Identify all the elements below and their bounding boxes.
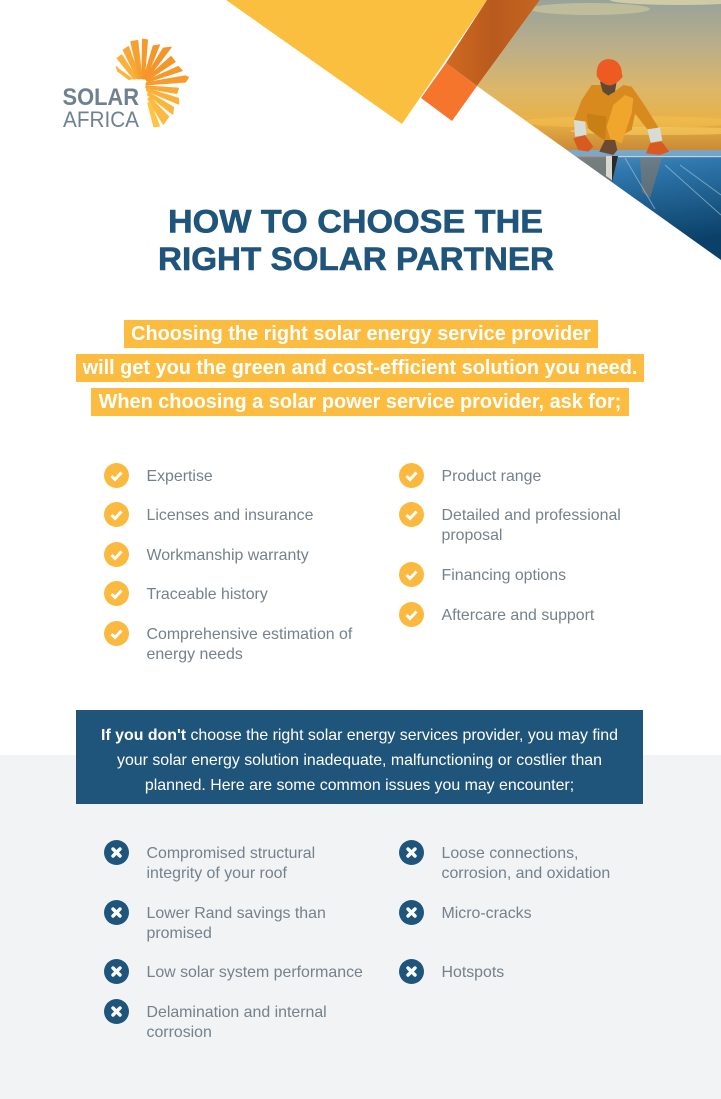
issues list: left column: integrity of your roof	[146, 865, 287, 882]
item: delamination: Delamination and internal	[146, 1004, 327, 1021]
issues list: right column: corrosion, and oxidation	[442, 865, 610, 882]
item: aftercare	[399, 602, 594, 627]
item: financing: Financing options	[442, 567, 566, 584]
item: expertise: Expertise	[146, 468, 213, 485]
item: low performance	[104, 959, 363, 984]
worker figure	[573, 59, 669, 155]
dark orange band	[446, 0, 540, 86]
highlight line 1: Choosing the right solar energy service provider	[131, 323, 591, 345]
background: lower grey section	[0, 755, 721, 1099]
item: estimation	[104, 621, 352, 663]
item: loose connections: Loose connections,	[442, 845, 578, 862]
item: licenses	[104, 502, 313, 527]
issues list: left column: corrosion	[146, 1024, 212, 1041]
item: structural integrity: Compromised structural	[146, 845, 315, 862]
callout: warning panel: If you don't choose the right solar energy services provider, you may find	[101, 727, 618, 744]
title: HOW TO CHOOSE THE	[168, 204, 543, 240]
item: hotspots: Hotspots	[442, 964, 504, 981]
logo: Solar Africa	[62, 38, 189, 131]
checklist: left column: energy needs	[146, 646, 243, 663]
item: aftercare: Aftercare and support	[442, 607, 594, 624]
item: low performance: Low solar system performance	[146, 964, 363, 981]
photo: solar worker on panels	[470, 0, 721, 260]
header graphics	[226, 0, 721, 260]
item: financing	[399, 562, 566, 587]
callout: warning panel	[76, 710, 643, 804]
item: rand savings: Lower Rand savings than	[146, 905, 326, 922]
item: loose connections	[399, 840, 610, 882]
logo wordmark: SOLAR	[62, 84, 139, 111]
checklist: right column	[399, 463, 621, 627]
icon: Africa sun rays	[116, 38, 189, 128]
callout: warning panel: planned. Here are some common issues you may encounter;	[145, 777, 574, 794]
issues list: left column: promised	[146, 925, 212, 942]
item: micro-cracks: Micro-cracks	[442, 905, 532, 922]
issues list: left column	[104, 840, 363, 1041]
highlighted intro text	[76, 320, 644, 416]
item: rand savings	[104, 900, 326, 942]
item: proposal	[399, 502, 621, 544]
item: licenses: Licenses and insurance	[146, 507, 313, 524]
callout: warning panel: your solar energy solution inadequate, malfunctioning or costlier than	[117, 752, 602, 769]
highlight line 3: When choosing a solar power service provider, ask for;	[99, 391, 621, 413]
highlight line 2: will get you the green and cost-efficient solution you need.	[83, 357, 637, 379]
item: history: Traceable history	[146, 586, 268, 603]
item: micro-cracks	[399, 900, 532, 925]
item: product range	[399, 463, 541, 488]
item: expertise	[104, 463, 213, 488]
checklist: right column: proposal	[442, 527, 502, 544]
item: product range: Product range	[442, 468, 541, 485]
item: delamination	[104, 999, 327, 1041]
item: hotspots	[399, 959, 504, 984]
title	[158, 204, 554, 277]
checklist: left column	[104, 463, 352, 663]
item: workmanship	[104, 542, 309, 567]
item: structural integrity	[104, 840, 315, 882]
item: estimation: Comprehensive estimation of	[146, 626, 352, 643]
issues list: right column	[399, 840, 610, 984]
yellow triangle	[226, 0, 487, 124]
orange parallelogram	[421, 63, 477, 121]
item: proposal: Detailed and professional	[442, 507, 621, 524]
item: workmanship: Workmanship warranty	[146, 547, 309, 564]
logo wordmark	[62, 84, 139, 131]
title: RIGHT SOLAR PARTNER	[158, 241, 554, 277]
item: history	[104, 581, 268, 606]
